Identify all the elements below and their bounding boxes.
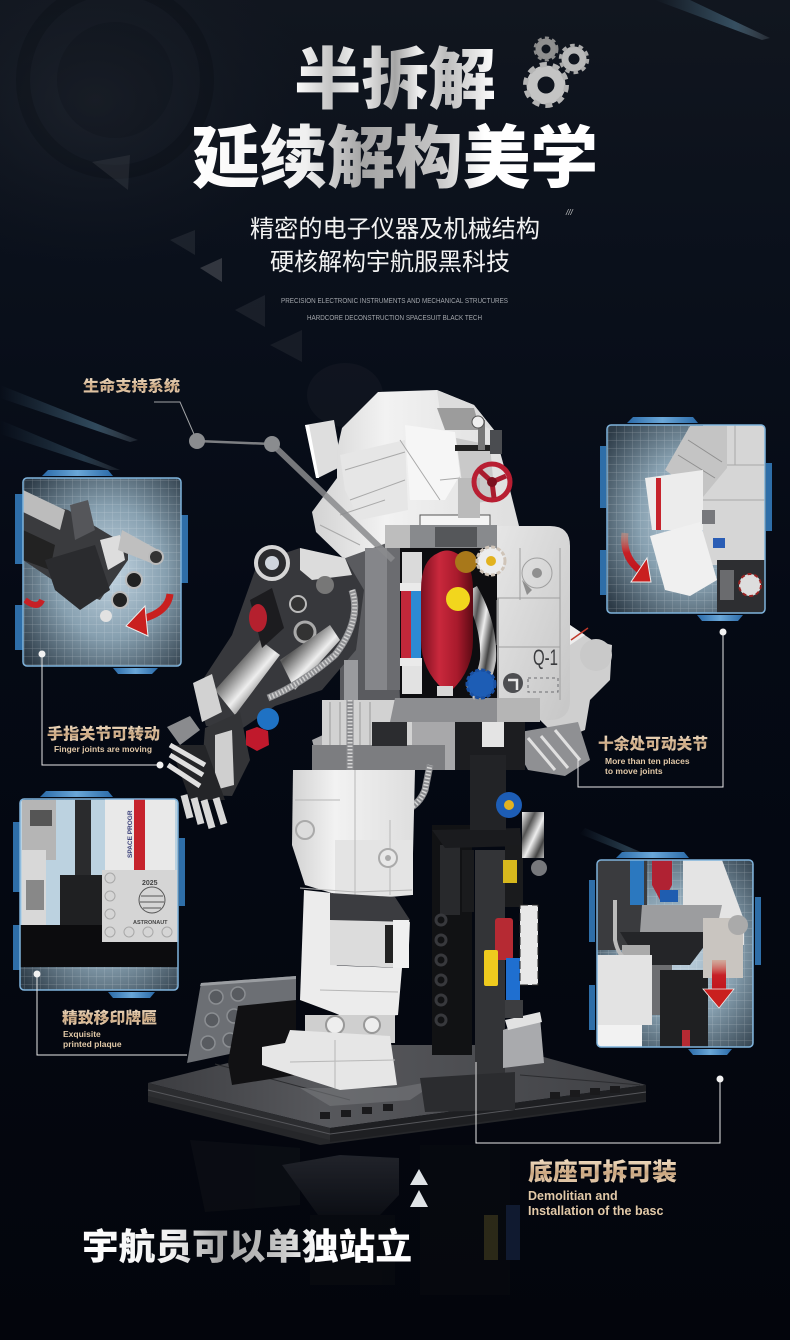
caption: more than ten places: More than ten places [605,756,690,766]
panel: movable joints [600,417,772,621]
callout: movable joints [578,628,726,787]
label: 底座可拆可装: 底座可拆可装 [528,1158,677,1186]
white leg [262,770,415,1090]
english subtitle 1: PRECISION ELECTRONIC INSTRUMENTS AND MECHANICAL STRUCTURES [281,298,508,305]
caption: exquisite printed plaque: Exquisite [63,1029,101,1039]
caption: finger joints: Finger joints are moving [54,744,152,754]
caption: more than ten places [605,756,690,776]
plaque with stand [187,976,296,1085]
leader: life support system [154,402,393,560]
caption: more than ten places: to move joints [605,766,663,776]
black leg mechanics [420,755,547,1112]
decorative slashes: /// [565,208,573,217]
caption: exquisite printed plaque [63,1029,122,1049]
shoulder, torso and right arm [312,540,612,776]
astronaut [167,390,612,1112]
arrow: red down [703,960,734,1008]
callout: removable base [476,1062,724,1218]
label: 生命支持系统: 生命支持系统 [83,377,180,395]
subtitle line 1: 精密的电子仪器及机械结构 [250,216,540,243]
caption: demolition and installation [528,1189,663,1218]
icon: up arrows [410,1169,428,1207]
label: 手指关节可转动: 手指关节可转动 [47,724,160,743]
hose [268,590,430,812]
arrow: curved red [126,594,170,636]
panel: printed plaque [13,791,185,998]
caption: demolition and installation: Demolitian and [528,1189,618,1203]
arrow: curved red [625,533,651,582]
callout: finger joints [38,650,164,768]
left arm, chrome mechanics [167,547,364,828]
backpack [365,525,570,722]
caption: demolition and installation: Installation of the basc [528,1204,663,1218]
text: 2025: 2025 [142,880,158,887]
english subtitle 2: HARDCORE DECONSTRUCTION SPACESUIT BLACK TECH [307,315,482,322]
caption: exquisite printed plaque: printed plaque [63,1039,122,1049]
red valve wheel [474,464,510,500]
base plate [148,1045,646,1145]
helmet [305,390,520,560]
label: 精致移印牌匾: 精致移印牌匾 [62,1008,157,1027]
text: space program: SPACE PROGR [127,810,134,858]
label: 十余处可动关节: 十余处可动关节 [598,734,708,753]
panel: removable base [589,852,761,1055]
subtitle line 2: 硬核解构宇航服黑科技 [270,249,510,276]
panel: finger joints [15,470,188,674]
title: 延续解构美学: 延续解构美学 [192,121,598,197]
icon: gears [526,38,588,106]
text: Q-1: Q-1 [533,645,558,670]
bottom caption: 宇航员可以单独站立 [82,1226,412,1267]
title: 半拆解: 半拆解 [294,43,496,118]
text: astronaut: ASTRONAUT [133,920,168,926]
reflection below base [190,1140,520,1295]
callout: printed plaque [34,970,187,1055]
